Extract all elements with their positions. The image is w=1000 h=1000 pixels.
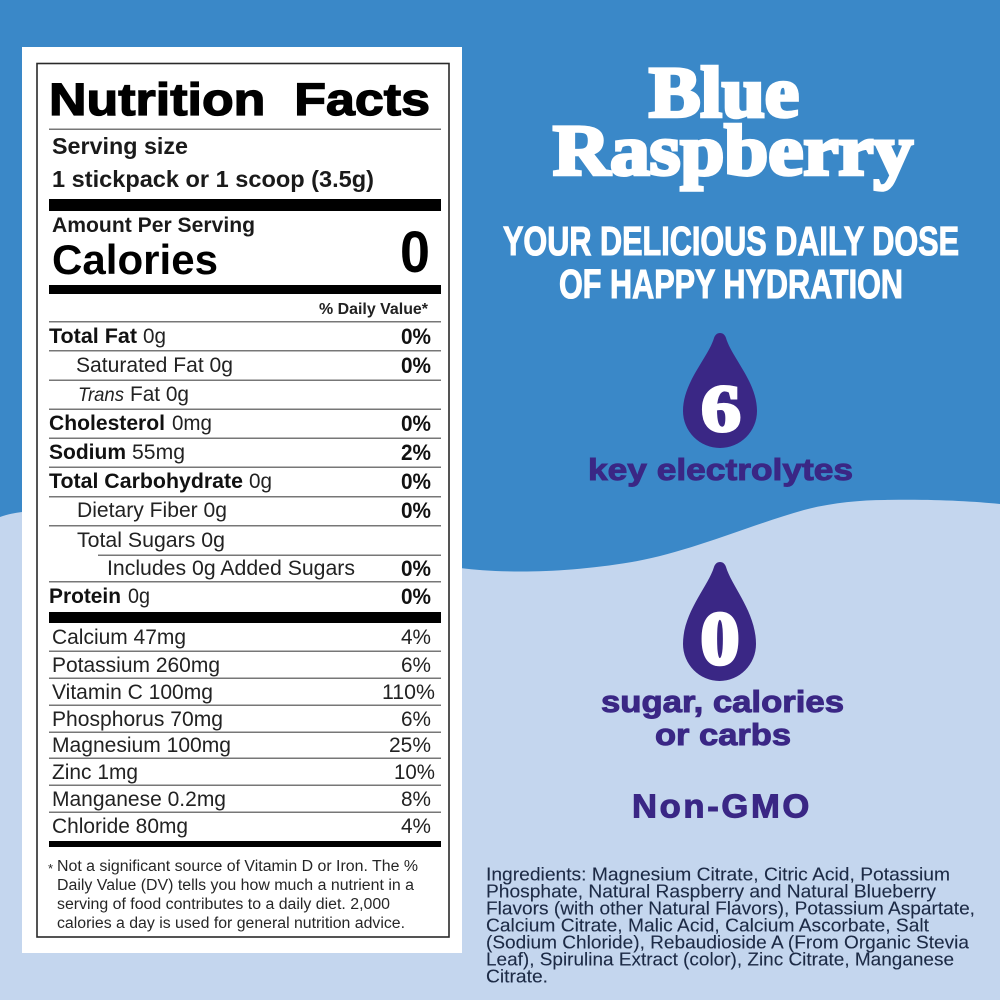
title: Blue Raspberry [553,52,913,190]
text block: ingredients: (Sodium Chloride), Rebaudioside A (From Organic Stevia [486,932,970,952]
row: total fat: Total Fat [49,325,137,348]
calories [52,220,430,285]
text block: ingredients: Calcium Citrate, Malic Acid, Calcium Ascorbate, Salt [486,915,929,935]
row: saturated fat [76,353,431,378]
icon: drop with 0 [683,562,756,681]
label: sugar, calories or carbs [601,684,844,752]
row: protein [49,584,431,609]
label: Non-GMO: Non-GMO [632,788,812,824]
row: chloride: Chloride 80mg [52,815,188,838]
title: Blue Raspberry: Raspberry [553,110,913,190]
row: zinc: Zinc 1mg [52,761,138,784]
text block: ingredients: Phosphate, Natural Raspberry and Natural Blueberry [486,881,936,901]
serving size: Serving size [52,133,188,159]
row: protein: 0% [401,584,431,609]
row: sodium: 55mg [132,441,185,464]
row: added sugars: 0% [401,556,431,581]
row: phosphorus [52,708,431,731]
percent daily value header: % Daily Value* [319,301,429,318]
footnote: calories a day is used for general nutrition advice. [57,915,405,932]
row: calcium: 4% [401,626,431,649]
row: total carbohydrate [49,469,431,494]
footnote: Not a significant source of Vitamin D or Iron. The % [57,858,418,875]
footnote: serving of food contributes to a daily diet. 2,000 [57,896,390,913]
row: magnesium: 25% [389,734,431,757]
row: total carbohydrate: 0% [401,469,431,494]
panel: nutrition facts label [22,47,462,953]
heading: Nutrition Facts: Nutrition Facts [49,74,430,125]
label: key electrolytes: key electrolytes [588,452,853,487]
row: total sugars: Total Sugars 0g [77,529,225,552]
row: chloride: 4% [401,815,431,838]
label: sugar, calories or carbs: or carbs [655,717,791,752]
tagline [503,218,959,307]
row: dietary fiber [77,498,431,523]
row: cholesterol: 0mg [172,412,212,435]
row: cholesterol: Cholesterol [49,412,165,435]
row: saturated fat: 0% [401,353,431,378]
amount per serving: Amount Per Serving [52,214,255,237]
row: magnesium: Magnesium 100mg [52,734,231,757]
text block: ingredients: Ingredients: Magnesium Citrate, Citric Acid, Potassium [486,864,950,884]
label border [37,64,449,937]
row: sodium [49,440,431,465]
row: cholesterol: 0% [401,411,431,436]
row: total carbohydrate: 0g [249,470,272,493]
row: trans fat [78,383,189,406]
row: sodium: Sodium [49,441,126,464]
row: protein: 0g [128,585,150,608]
row: sodium: 2% [401,440,431,465]
row: vitamin c [52,681,435,704]
serving size: 1 stickpack or 1 scoop (3.5g) [52,166,374,192]
label: sugar, calories or carbs: sugar, calories [601,684,844,719]
icon: drop with 6: 6 [701,372,741,446]
row: manganese: Manganese 0.2mg [52,788,226,811]
row: saturated fat: Saturated Fat 0g [76,354,233,377]
row: manganese [52,788,431,811]
row: potassium [52,654,431,677]
row: added sugars: Includes 0g Added Sugars [107,557,355,580]
footnote: Daily Value (DV) tells you how much a nutrient in a [57,877,414,894]
serving size [52,133,374,192]
row: calcium [52,626,431,649]
footnote: * [48,861,53,876]
background: light blue wave [0,500,1000,1000]
row: dietary fiber: Dietary Fiber 0g [77,499,227,522]
text block: ingredients: Flavors (with other Natural Flavors), Potassium Aspartate, [486,898,975,918]
row: phosphorus: 6% [401,708,431,731]
row: zinc [52,761,435,784]
footnote [48,858,418,932]
row: vitamin c: Vitamin C 100mg [52,681,213,704]
panel background [22,47,462,953]
row: dietary fiber: 0% [401,498,431,523]
text block: ingredients: Leaf), Spirulina Extract (color), Zinc Citrate, Manganese [486,949,954,969]
icon: drop with 0: 0 [701,598,739,680]
row: trans fat: Trans [78,385,124,406]
row: cholesterol [49,411,431,436]
row: total carbohydrate: Total Carbohydrate [49,470,243,493]
row: potassium: 6% [401,654,431,677]
text block: ingredients: Citrate. [486,966,548,986]
row: manganese: 8% [401,788,431,811]
row: zinc: 10% [394,761,435,784]
row: phosphorus: Phosphorus 70mg [52,708,223,731]
row: total fat [49,324,431,349]
calories: 0 [400,220,430,285]
row: total fat: 0g [143,325,166,348]
row: potassium: Potassium 260mg [52,654,220,677]
icon: drop with 6 [683,333,757,448]
row: added sugars [107,556,431,581]
calories: Calories [52,236,218,283]
title: Blue Raspberry: Blue [649,52,799,132]
row: trans fat: Fat 0g [130,383,189,406]
row: total fat: 0% [401,324,431,349]
row: calcium: Calcium 47mg [52,626,186,649]
row: protein: Protein [49,585,121,608]
row: chloride [52,815,431,838]
row: vitamin c: 110% [382,681,435,704]
text block: ingredients [486,864,975,986]
row: magnesium [52,734,431,757]
